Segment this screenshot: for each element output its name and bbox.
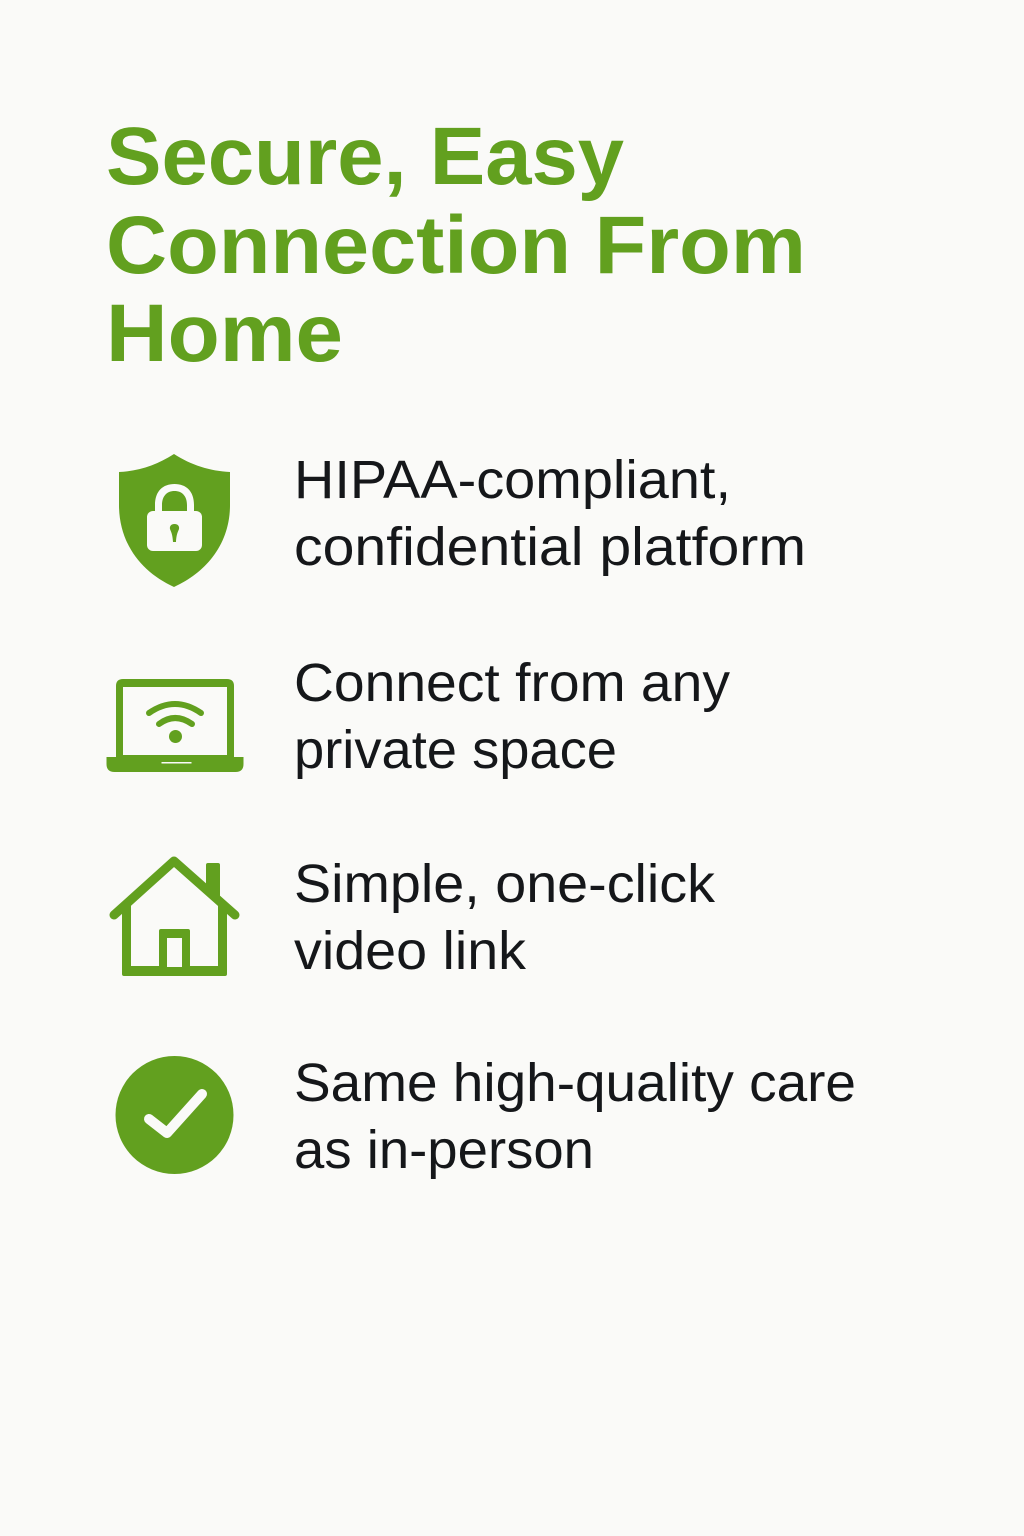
text: video link: video link — [294, 921, 527, 981]
icon: check circle — [116, 1056, 234, 1174]
text: HIPAA: HIPAA-compliant, — [294, 450, 731, 510]
text: HIPAA: confidential platform — [294, 517, 806, 577]
title: Secure, Easy — [106, 111, 624, 202]
title: Home — [106, 288, 343, 379]
text: quality care — [294, 1053, 856, 1180]
icon: house — [114, 861, 235, 976]
title: Connection From — [106, 200, 806, 291]
text: video link: Simple, one-click — [294, 854, 716, 914]
text: quality care: Same high-quality care — [294, 1053, 856, 1113]
text: quality care: as in-person — [294, 1120, 594, 1180]
text: HIPAA — [294, 450, 806, 577]
icon: shield with padlock — [119, 454, 230, 587]
icon: laptop with wifi — [106, 679, 244, 772]
text: connect — [294, 653, 730, 780]
text: video link — [294, 854, 716, 981]
title — [106, 111, 806, 379]
text: connect: Connect from any — [294, 653, 730, 713]
text: connect: private space — [294, 720, 617, 780]
